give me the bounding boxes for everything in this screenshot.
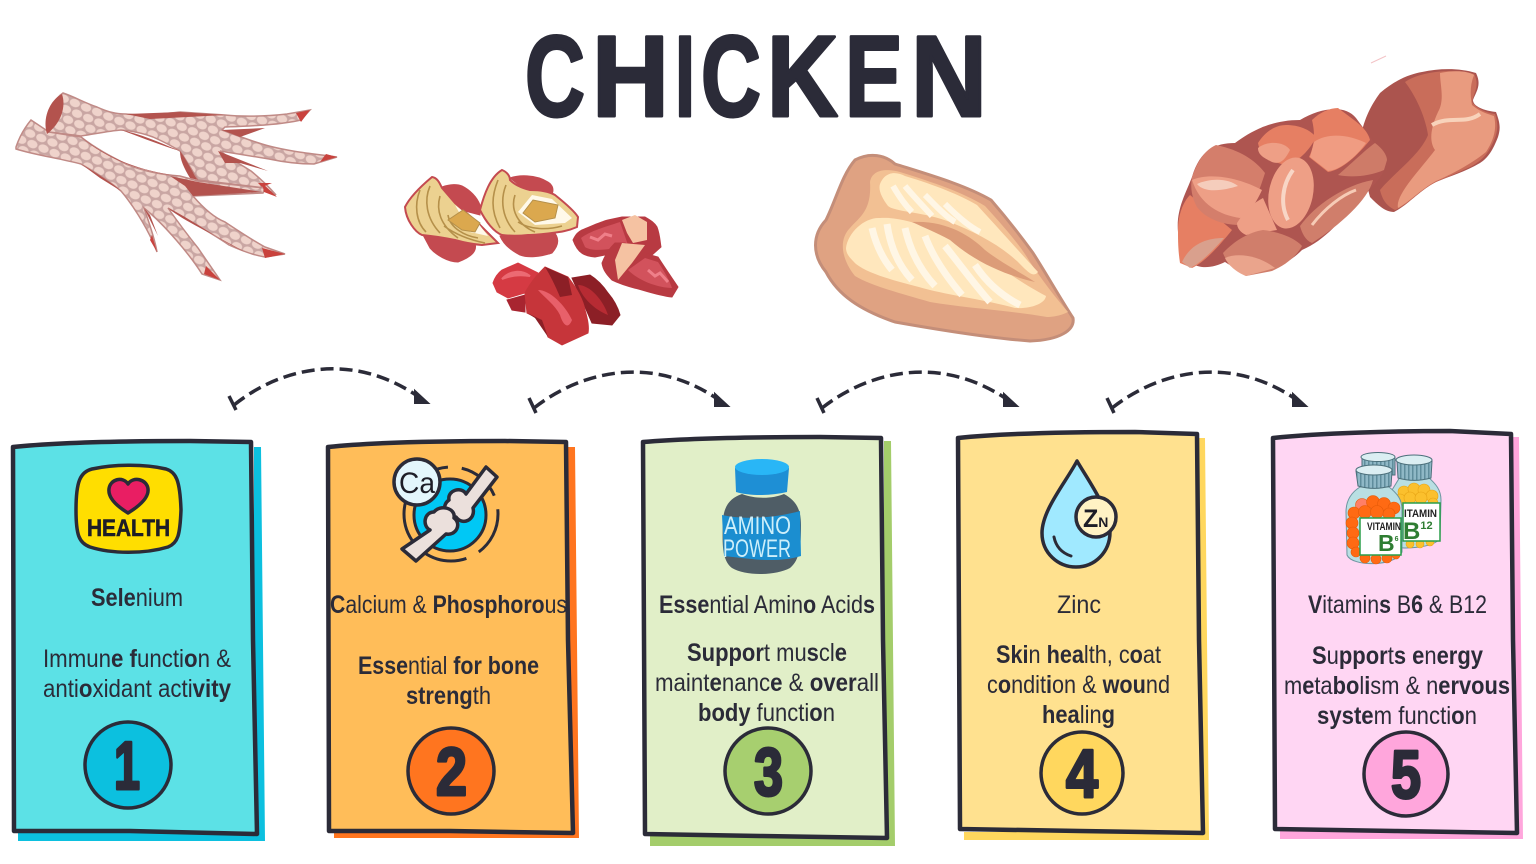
title: E [845, 13, 903, 141]
upper foot [47, 93, 337, 195]
description: condition & wound [987, 671, 1170, 699]
description [987, 641, 1170, 729]
description: Supports energy [1312, 642, 1483, 670]
right gizzard [480, 170, 578, 257]
arrow: dashed 1 to 2 [229, 369, 428, 410]
arrow: dashed 4 to 5 [1107, 372, 1306, 413]
title: C [525, 13, 585, 141]
number badge 2 [408, 728, 494, 814]
icon: zinc droplet [1042, 461, 1116, 567]
icon: health badge: HEALTH [87, 515, 170, 542]
liver [493, 263, 620, 345]
description: Immune function & [43, 645, 231, 673]
title: H [592, 13, 669, 141]
number badge 2: 2 [436, 734, 467, 810]
number badge 4 [1041, 732, 1123, 814]
description: Support muscle [687, 639, 847, 667]
illustration: gizzards and hearts [405, 170, 678, 345]
description [358, 652, 539, 710]
number badge 1 [85, 722, 171, 808]
description: strength [406, 682, 491, 710]
description: antioxidant activity [43, 675, 231, 703]
panel: calcium and phosphorous [328, 441, 579, 838]
orange tablets [1346, 496, 1400, 564]
icon: amino supplement bottle: POWER [723, 535, 791, 563]
illustration: chicken breast [816, 155, 1073, 341]
front bottle [1346, 465, 1402, 564]
panel: zinc [958, 432, 1209, 840]
panel: vitamins B6 and B12 [1273, 431, 1523, 839]
leg cut [45, 94, 63, 134]
description: Skin health, coat [996, 641, 1161, 669]
icon: vitamin bottles [1346, 452, 1441, 564]
yellow tablets [1394, 483, 1438, 548]
title: K [767, 13, 838, 141]
heart pieces [573, 215, 678, 297]
description: body function [698, 699, 835, 727]
panel: selenium [13, 441, 265, 841]
back bottle [1361, 452, 1395, 475]
upper bone [445, 467, 497, 521]
lower foot [16, 120, 285, 280]
lower bone [402, 508, 458, 561]
arrow: dashed 2 to 3 [529, 372, 728, 413]
description: maintenance & overall [655, 669, 879, 697]
icon: health badge [76, 465, 181, 552]
arrow: dashed 3 to 4 [817, 372, 1017, 413]
number badge 5: 5 [1391, 737, 1421, 813]
title: N [911, 13, 987, 141]
heading: Zinc [1057, 591, 1101, 619]
illustration: chicken feet [16, 93, 337, 280]
number badge 1: 1 [114, 728, 140, 804]
icon: calcium and bone [394, 459, 498, 561]
icon: calcium and bone: Ca [399, 467, 435, 500]
description: metabolism & nervous [1284, 672, 1510, 700]
number badge 5 [1364, 732, 1448, 816]
title: C [701, 13, 761, 141]
description [655, 639, 879, 727]
right bottle [1392, 455, 1441, 548]
heading: Vitamins B6 & B12 [1308, 591, 1487, 619]
description [1284, 642, 1510, 730]
front bottle: 6 [1395, 536, 1399, 543]
number badge 3 [725, 728, 811, 814]
icon: zinc droplet: ZN [1083, 505, 1108, 533]
right bottle: B [1403, 518, 1420, 545]
icon: amino supplement bottle: AMINO [724, 512, 791, 540]
description [43, 645, 231, 703]
heading: Selenium [91, 584, 183, 612]
left gizzard [405, 177, 498, 262]
toe shadows [81, 112, 268, 252]
heading: Calcium & Phosphorous [330, 591, 567, 619]
chunks [1178, 108, 1387, 276]
illustration: chicken thigh meat [1178, 56, 1500, 276]
panel: essential amino acids [643, 437, 895, 846]
icon: amino supplement bottle [722, 459, 801, 574]
description: Essential for bone [358, 652, 539, 680]
right bottle: ITAMIN [1404, 508, 1437, 520]
front bottle: VITAMIN [1367, 521, 1401, 533]
cluster base [1178, 109, 1387, 271]
title: I [675, 13, 695, 141]
number badge 3: 3 [754, 734, 783, 810]
big piece [1362, 69, 1500, 212]
right bottle: 12 [1420, 520, 1433, 532]
number badge 4: 4 [1066, 736, 1098, 812]
description: system function [1317, 702, 1477, 730]
description: healing [1042, 701, 1115, 729]
front bottle: B [1378, 530, 1395, 556]
claws [150, 110, 337, 280]
heading: Essential Amino Acids [659, 591, 875, 619]
